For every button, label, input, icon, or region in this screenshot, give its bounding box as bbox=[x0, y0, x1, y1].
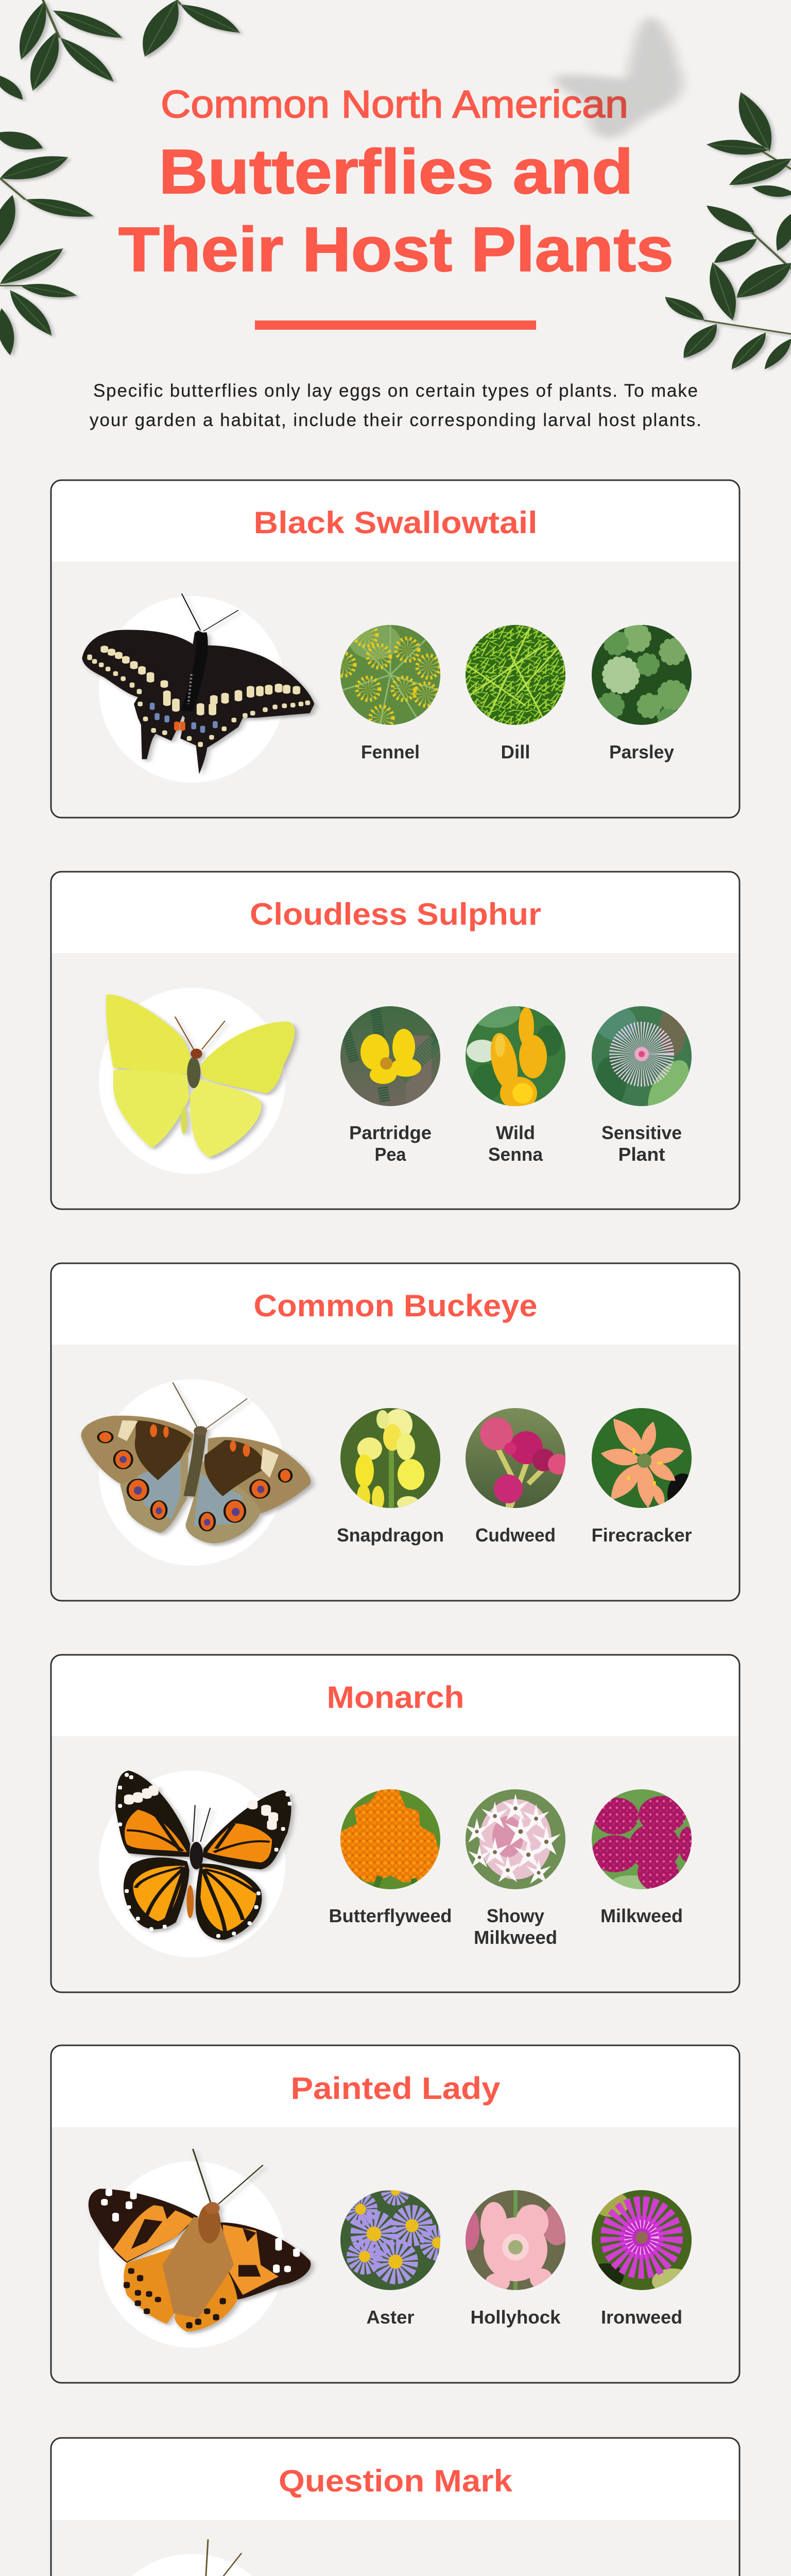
plant label: Pea bbox=[375, 1144, 406, 1165]
title line: Their Host Plants: Their Host Plants bbox=[118, 214, 674, 284]
plant photo bbox=[340, 625, 440, 725]
panel header band bbox=[51, 2438, 740, 2520]
decorative leaves framing the header bbox=[0, 0, 791, 369]
plant label: Cudweed bbox=[475, 1524, 556, 1546]
panel border bbox=[51, 872, 740, 1209]
plant label: Partridge bbox=[349, 1122, 432, 1143]
plant label: Snapdragon bbox=[337, 1524, 444, 1546]
plant photo bbox=[465, 1789, 565, 1889]
plant label: Firecracker bbox=[591, 1524, 692, 1546]
plant label bbox=[474, 1905, 557, 1948]
panel: Painted Lady bbox=[50, 2044, 741, 2383]
plant: Cudweed bbox=[466, 1408, 569, 1546]
panel border bbox=[51, 1655, 740, 1992]
panel border bbox=[51, 2045, 740, 2383]
panel: Cloudless Sulphur bbox=[50, 871, 741, 1210]
white circle behind butterfly bbox=[99, 1379, 285, 1566]
plant label: Sensitive bbox=[601, 1122, 682, 1143]
plant label bbox=[601, 1122, 682, 1165]
title divider bbox=[255, 320, 536, 330]
plant photo bbox=[340, 1006, 440, 1106]
butterfly: cloudless sulphur bbox=[106, 994, 295, 1157]
plant photo bbox=[340, 1789, 440, 1889]
plant: Wild Senna bbox=[466, 997, 565, 1165]
plant label bbox=[488, 1122, 543, 1165]
plant photo bbox=[340, 2183, 448, 2290]
panel: Black Swallowtail bbox=[50, 479, 741, 818]
white circle behind butterfly bbox=[99, 1771, 285, 1957]
plant label: Ironweed bbox=[601, 2307, 682, 2328]
intro paragraph: Specific butterflies only lay eggs on certain types of plants. To make bbox=[93, 381, 698, 401]
plant: Partridge Pea bbox=[340, 1006, 440, 1165]
heading: Cloudless Sulphur bbox=[250, 897, 541, 931]
panel header band bbox=[51, 480, 740, 562]
plant: Hackberry bbox=[592, 2573, 692, 2576]
plant label: Parsley bbox=[609, 741, 674, 762]
butterfly: common buckeye bbox=[81, 1382, 311, 1544]
plant label: Fennel bbox=[361, 741, 420, 762]
panel: Question Mark bbox=[50, 2437, 741, 2576]
white circle behind butterfly bbox=[99, 988, 285, 1174]
plant photo bbox=[340, 1408, 440, 1511]
plant photo bbox=[466, 1006, 565, 1106]
plant photo bbox=[592, 625, 692, 726]
plant photo bbox=[588, 2190, 693, 2294]
plant: Parsley bbox=[592, 625, 692, 762]
panel border bbox=[51, 2438, 740, 2576]
plant: Hollyhock bbox=[461, 2190, 571, 2328]
plant: Milkweed bbox=[591, 1789, 695, 1926]
intro paragraph bbox=[90, 381, 701, 430]
plant label bbox=[349, 1122, 432, 1165]
plant: Aster bbox=[340, 2183, 448, 2328]
plant: Ironweed bbox=[588, 2190, 693, 2328]
plant label: Milkweed bbox=[600, 1905, 683, 1926]
white circle behind butterfly bbox=[99, 596, 285, 783]
plant photo bbox=[591, 1789, 695, 1891]
heading: Black Swallowtail bbox=[253, 505, 538, 540]
panel header band bbox=[51, 2045, 740, 2127]
plant photo bbox=[466, 1408, 569, 1508]
heading: Monarch bbox=[326, 1680, 465, 1715]
butterfly: question mark bbox=[93, 2539, 306, 2576]
butterfly shadow decoration bbox=[554, 17, 683, 139]
title line: Common North American: Common North American bbox=[161, 82, 628, 126]
header section bbox=[0, 0, 791, 430]
title line: Butterflies and: Butterflies and bbox=[159, 137, 633, 207]
plant: Firecracker bbox=[591, 1408, 698, 1546]
butterfly: monarch bbox=[115, 1771, 291, 1940]
heading: Common Buckeye bbox=[253, 1289, 538, 1323]
plant label: Dill bbox=[501, 741, 530, 762]
intro paragraph: your garden a habitat, include their corresponding larval host plants. bbox=[90, 410, 701, 430]
plant: Fennel bbox=[340, 625, 440, 758]
heading: Painted Lady bbox=[290, 2071, 501, 2106]
plant label: Wild bbox=[496, 1122, 535, 1143]
panel border bbox=[51, 1263, 740, 1601]
plant photo bbox=[592, 1408, 692, 1508]
plant: Snapdragon bbox=[337, 1408, 444, 1546]
plant label: Senna bbox=[488, 1144, 543, 1165]
plant photo bbox=[461, 2190, 571, 2292]
butterfly: black swallowtail bbox=[82, 594, 314, 774]
white circle behind butterfly bbox=[99, 2161, 285, 2348]
plant label: Butterflyweed bbox=[329, 1905, 452, 1926]
white circle behind butterfly bbox=[99, 2554, 285, 2576]
plant label: Milkweed bbox=[474, 1927, 557, 1948]
plant label: Hollyhock bbox=[470, 2307, 561, 2328]
heading: Question Mark bbox=[279, 2464, 513, 2498]
plant: Showy Milkweed bbox=[465, 1789, 565, 1948]
panel: Common Buckeye bbox=[50, 1262, 741, 1601]
plant: Sensitive Plant bbox=[592, 1005, 697, 1165]
plant: Butterflyweed bbox=[329, 1789, 452, 1926]
title bbox=[118, 82, 674, 284]
plant photo bbox=[592, 1006, 692, 1106]
plant photo bbox=[466, 625, 565, 725]
panel header band bbox=[51, 872, 740, 953]
panel border bbox=[51, 480, 740, 818]
panel header band bbox=[51, 1263, 740, 1345]
plant label: Aster bbox=[367, 2307, 414, 2328]
butterfly: painted lady bbox=[89, 2149, 311, 2332]
plant label: Plant bbox=[618, 1144, 665, 1165]
plant label: Showy bbox=[487, 1905, 544, 1926]
plant: Dill bbox=[466, 625, 565, 762]
plant photo bbox=[592, 2573, 692, 2576]
panel: Monarch bbox=[50, 1654, 741, 1993]
panel header band bbox=[51, 1655, 740, 1736]
